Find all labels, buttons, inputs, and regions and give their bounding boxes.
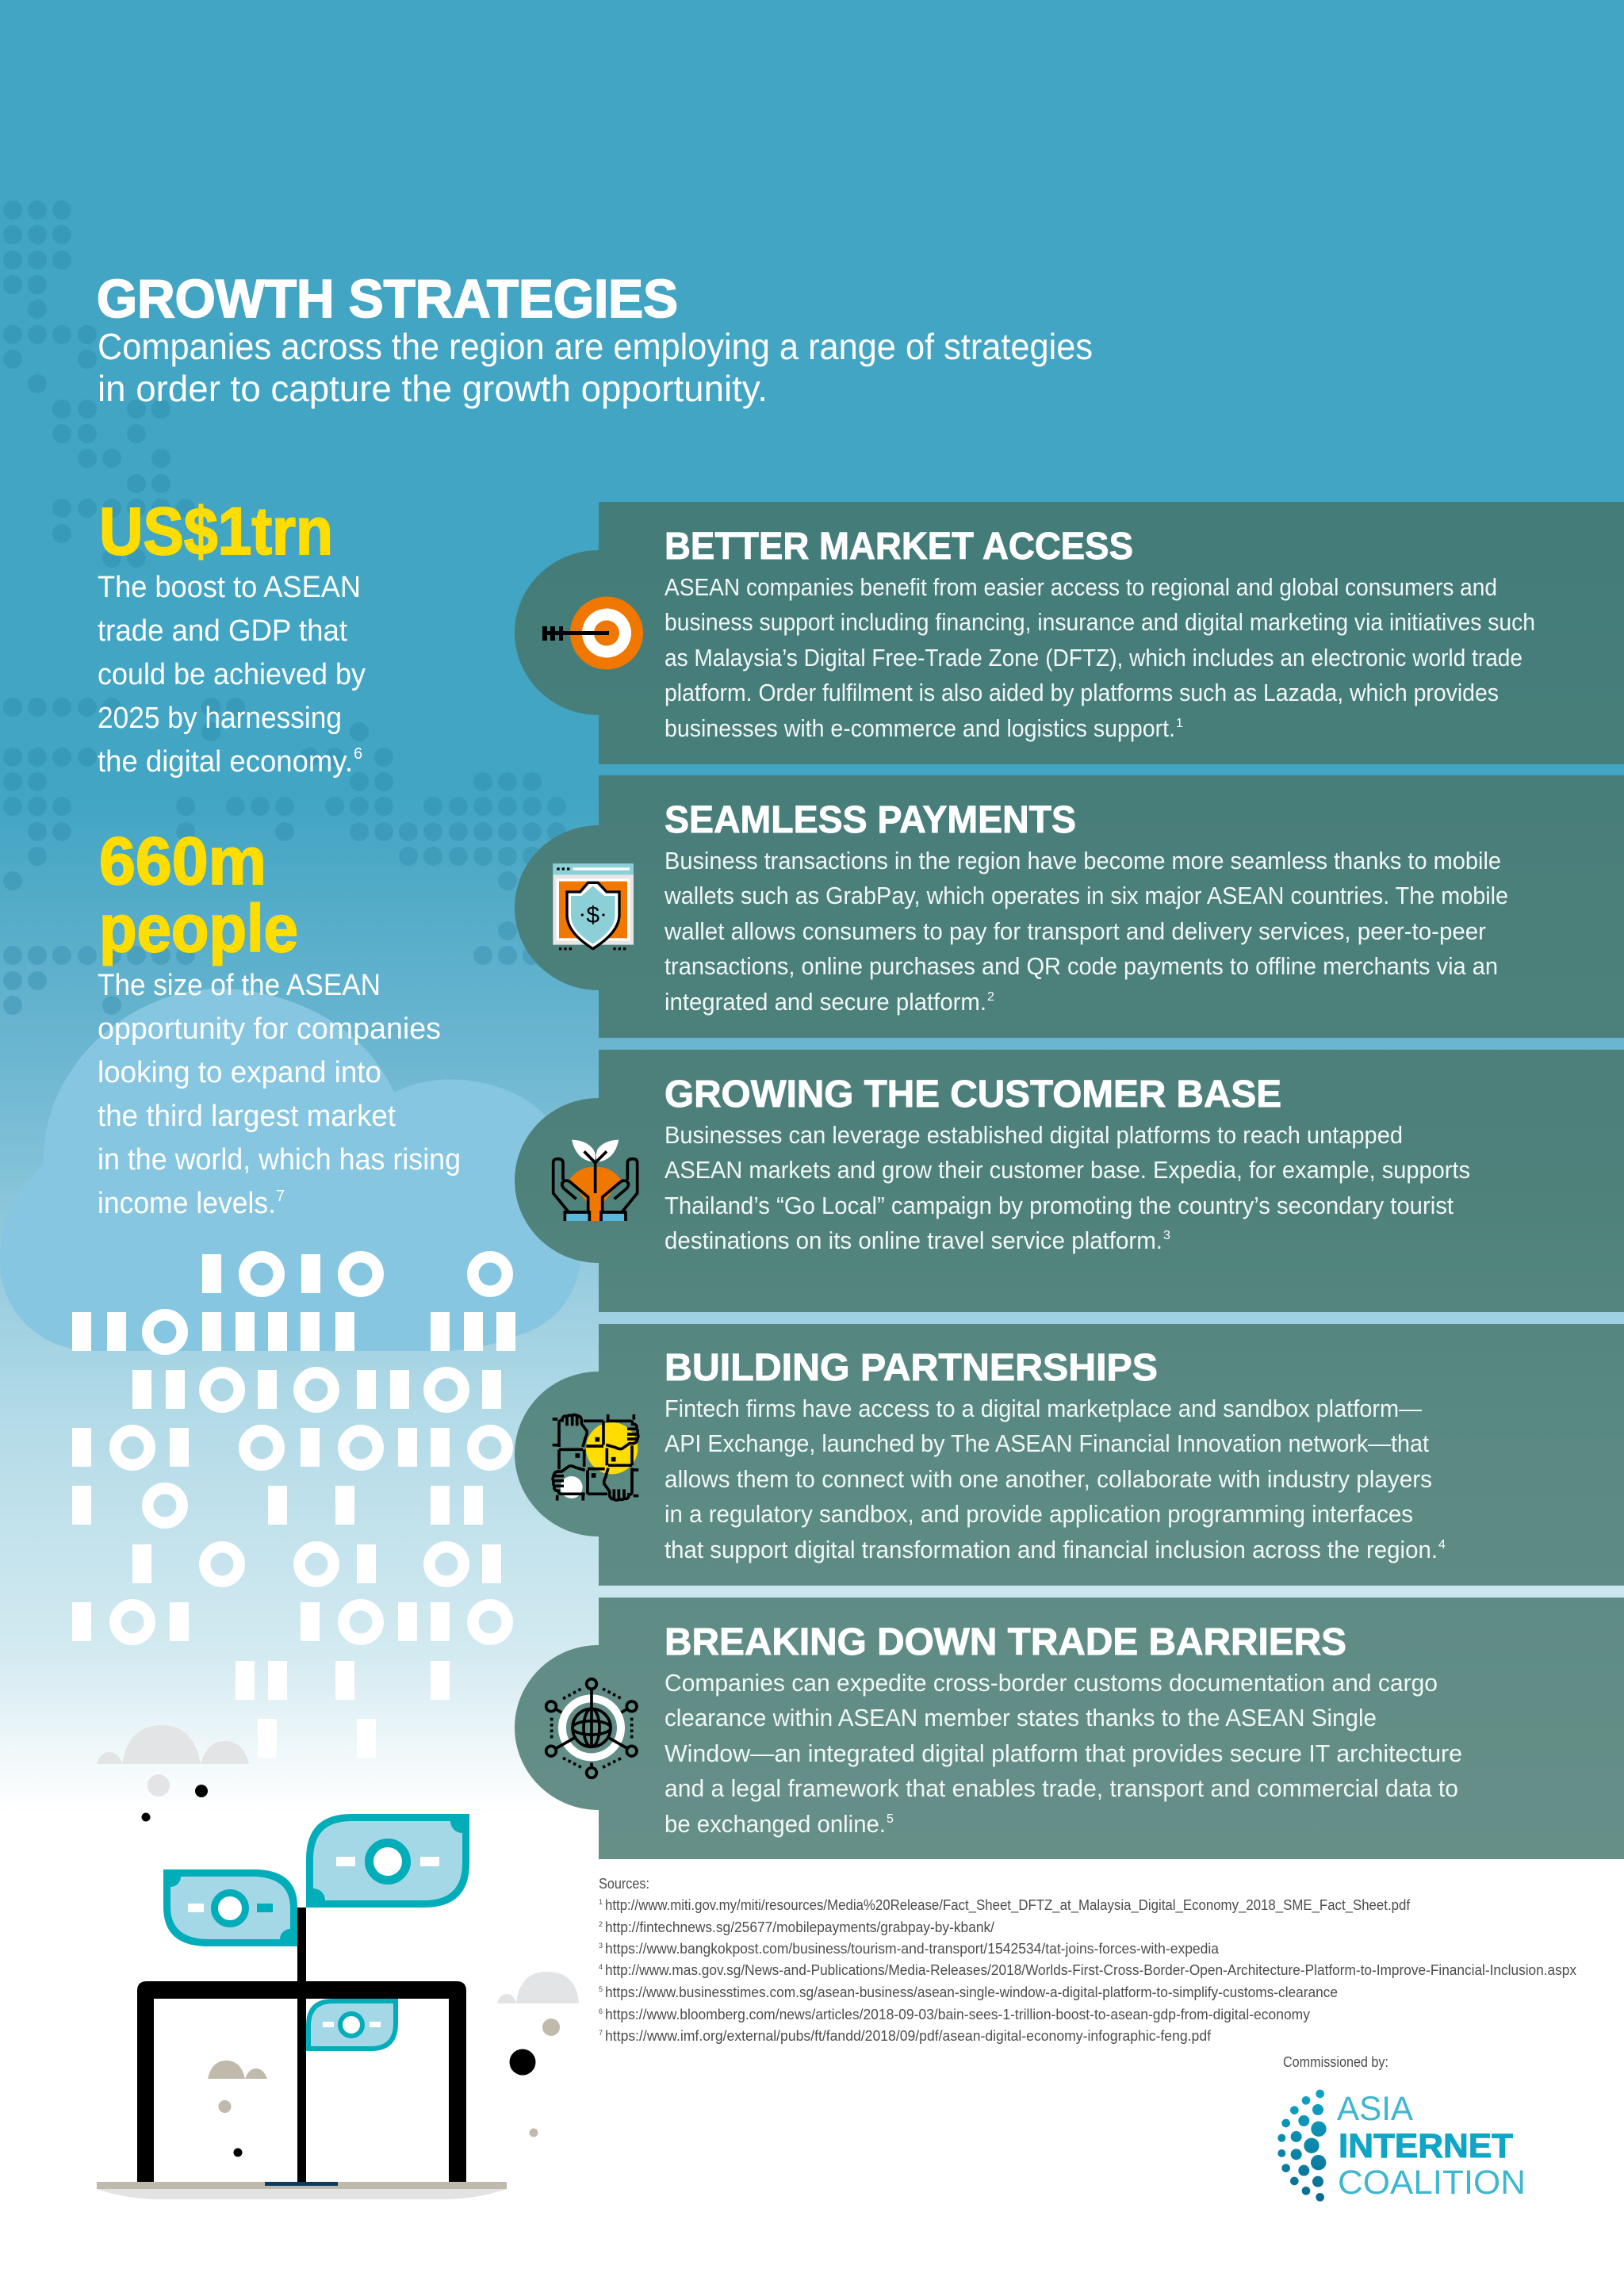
- sources list: 3: [599, 1942, 603, 1950]
- dots right: [509, 2019, 560, 2137]
- money leaf: left: [163, 1869, 297, 1946]
- title: GROWTH STRATEGIES: [97, 269, 678, 329]
- body text: and a legal framework that enables trade, transport and commercial data to: [665, 1774, 1458, 1802]
- heading: GROWING THE CUSTOMER BASE: [665, 1073, 1281, 1115]
- illustration: plant growing from laptop: [97, 1725, 579, 2199]
- tan cloud inside laptop: [208, 2061, 267, 2079]
- body text: destinations on its online travel service platform.: [665, 1226, 1162, 1254]
- laptop base: [97, 2182, 507, 2199]
- heading: BUILDING PARTNERSHIPS: [665, 1347, 1158, 1389]
- body text: ASEAN companies benefit from easier access to regional and global consumers and: [665, 573, 1497, 601]
- panel: better market access: [515, 502, 1624, 764]
- money leaf: small: [306, 1999, 398, 2051]
- sources list: http://www.mas.gov.sg/News-and-Publications/Media-Releases/2018/Worlds-First-Cross-Border-Open-Architecture-Platform-to-Improve-Financial-Inclusion.aspx: [605, 1962, 1576, 1978]
- stat text: ASEAN opportunity: looking to expand into: [98, 1056, 381, 1089]
- laptop frame: [137, 1981, 466, 2182]
- dots under grey cloud: [141, 1774, 208, 1822]
- sources list: 4: [599, 1963, 603, 1971]
- sources list: https://www.bangkokpost.com/business/tourism-and-transport/1542534/tat-joins-forces-with-expedia: [605, 1941, 1220, 1957]
- body text: 2: [987, 990, 994, 1004]
- icon: secure payment shield: $: [586, 902, 599, 928]
- body text: Window—an integrated digital platform that provides secure IT architecture: [665, 1739, 1462, 1767]
- body text: wallets such as GrabPay, which operates in six major ASEAN countries. The mobile: [664, 882, 1508, 909]
- body text: as Malaysia’s Digital Free-Trade Zone (DFTZ), which includes an electronic world trade: [665, 644, 1522, 672]
- logo wordmark: INTERNET: [1339, 2127, 1513, 2165]
- stat text: ASEAN opportunity: opportunity for companies: [98, 1012, 441, 1046]
- body text: Business transactions in the region have become more seamless thanks to mobile: [665, 847, 1501, 874]
- stat text: trade and GDP boost: trade and GDP that: [98, 614, 347, 648]
- stat text: ASEAN opportunity: income levels.: [98, 1187, 276, 1220]
- sources list: [599, 1876, 1576, 2044]
- sources list: 5: [599, 1985, 603, 1993]
- body text: Fintech firms have access to a digital marketplace and sandbox platform—: [665, 1395, 1422, 1422]
- stat: 660m people: [99, 824, 298, 966]
- stat text: trade and GDP boost: 6: [354, 745, 362, 763]
- binary digit rain: [72, 1254, 515, 1758]
- body text: 5: [887, 1812, 894, 1826]
- stat text: ASEAN opportunity: The size of the ASEAN: [98, 969, 381, 1002]
- body text: wallet allows consumers to pay for transport and delivery services, peer-to-peer: [664, 917, 1486, 945]
- body text: businesses with e-commerce and logistics support.: [665, 714, 1175, 742]
- body text: clearance within ASEAN member states thanks to the ASEAN Single: [665, 1704, 1377, 1732]
- heading: BETTER MARKET ACCESS: [665, 526, 1133, 568]
- money leaf: top right: [306, 1814, 469, 1908]
- grey cloud right: [497, 1972, 579, 2003]
- body text: in a regulatory sandbox, and provide application programming interfaces: [665, 1500, 1413, 1528]
- panel: growing the customer base: [515, 1050, 1624, 1312]
- sources list: 6: [599, 2007, 603, 2015]
- icon: hands holding plant: [553, 1140, 638, 1221]
- body text: 3: [1163, 1229, 1170, 1242]
- body text: platform. Order fulfilment is also aided by platforms such as Lazada, which provides: [665, 679, 1499, 706]
- icon: interlocking hands: [553, 1414, 638, 1501]
- body text: [665, 1395, 1446, 1563]
- sources list: http://www.miti.gov.my/miti/resources/Media%20Release/Fact_Sheet_DFTZ_at_Malaysia_Digital_Economy_2018_SME_Fact_Sheet.pdf: [605, 1897, 1411, 1914]
- icon: target and arrow: [542, 596, 643, 669]
- body text: transactions, online purchases and QR code payments to offline merchants via an: [665, 952, 1498, 980]
- commissioned by label: Commissioned by:: [1283, 2054, 1388, 2070]
- body text: API Exchange, launched by The ASEAN Financial Innovation network—that: [665, 1429, 1429, 1457]
- logo wordmark: ASIA: [1337, 2090, 1413, 2128]
- panel: building partnerships: [515, 1324, 1624, 1586]
- stat text: ASEAN opportunity: the third largest market: [98, 1100, 396, 1133]
- cloud: [0, 989, 580, 1351]
- subtitle: Companies across the region are employing a range of strategies: [98, 326, 1093, 367]
- body text: integrated and secure platform.: [665, 988, 986, 1016]
- stat text: trade and GDP boost: the digital economy.: [98, 745, 353, 779]
- sources list: https://www.businesstimes.com.sg/asean-business/asean-single-window-a-digital-platform-to-simplify-customs-clearance: [605, 1984, 1338, 2000]
- body text: allows them to connect with one another, collaborate with industry players: [665, 1465, 1432, 1493]
- sources list: Sources:: [599, 1876, 649, 1892]
- body text: [665, 573, 1535, 742]
- body text: Thailand’s “Go Local” campaign by promoting the country’s secondary tourist: [665, 1192, 1454, 1219]
- dots inside laptop: [219, 2100, 243, 2156]
- stat text: ASEAN opportunity: [98, 969, 461, 1220]
- stat text: trade and GDP boost: could be achieved by: [98, 658, 366, 691]
- body text: Companies can expedite cross-border customs documentation and cargo: [665, 1669, 1438, 1697]
- body text: business support including financing, insurance and digital marketing via initiatives such: [665, 608, 1535, 636]
- stat text: trade and GDP boost: The boost to ASEAN: [98, 571, 361, 604]
- stem: [297, 1908, 306, 2182]
- dotted world map pattern: [13, 210, 557, 1005]
- body text: [664, 847, 1508, 1016]
- stat: 660m people: 660m: [99, 824, 266, 898]
- sources list: 2: [599, 1920, 603, 1928]
- sources list: 1: [599, 1898, 603, 1906]
- body text: 4: [1438, 1538, 1446, 1552]
- grey cloud upper left: [97, 1725, 249, 1764]
- sources list: https://www.bloomberg.com/news/articles/2018-09-03/bain-sees-1-trillion-boost-to-asean-gdp-from-digital-economy: [605, 2007, 1310, 2022]
- stat text: ASEAN opportunity: 7: [276, 1188, 285, 1205]
- logo wordmark: [1337, 2090, 1526, 2202]
- stat text: trade and GDP boost: [98, 571, 366, 779]
- body text: that support digital transformation and financial inclusion across the region.: [665, 1536, 1438, 1563]
- subtitle: in order to capture the growth opportunity.: [98, 368, 768, 409]
- sources list: https://www.imf.org/external/pubs/ft/fandd/2018/09/pdf/asean-digital-economy-infographic-feng.pdf: [605, 2028, 1212, 2044]
- subtitle: [98, 326, 1093, 409]
- icon: secure payment shield: [553, 863, 634, 949]
- logo: Asia Internet Coalition: [1277, 2090, 1526, 2202]
- body text: [665, 1669, 1462, 1838]
- logo wordmark: COALITION: [1338, 2164, 1526, 2202]
- sources list: http://fintechnews.sg/25677/mobilepayments/grabpay-by-kbank/: [605, 1919, 994, 1935]
- stat text: trade and GDP boost: 2025 by harnessing: [98, 702, 342, 735]
- body text: ASEAN markets and grow their customer base. Expedia, for example, supports: [665, 1156, 1470, 1184]
- panel: breaking down trade barriers: [515, 1598, 1624, 1859]
- body text: Businesses can leverage established digital platforms to reach untapped: [665, 1121, 1403, 1149]
- stat: US$1trn: US$1trn: [99, 494, 333, 568]
- sources list: 7: [599, 2029, 603, 2037]
- body text: 1: [1176, 717, 1183, 730]
- body text: [665, 1121, 1470, 1254]
- panel: seamless payments: [515, 775, 1624, 1038]
- heading: SEAMLESS PAYMENTS: [665, 799, 1076, 841]
- stat text: ASEAN opportunity: in the world, which has rising: [98, 1143, 461, 1177]
- logo dots: [1277, 2090, 1327, 2202]
- body text: be exchanged online.: [665, 1810, 886, 1838]
- stat: 660m people: people: [99, 891, 298, 966]
- icon: connected globe: [546, 1679, 637, 1777]
- heading: BREAKING DOWN TRADE BARRIERS: [665, 1621, 1346, 1663]
